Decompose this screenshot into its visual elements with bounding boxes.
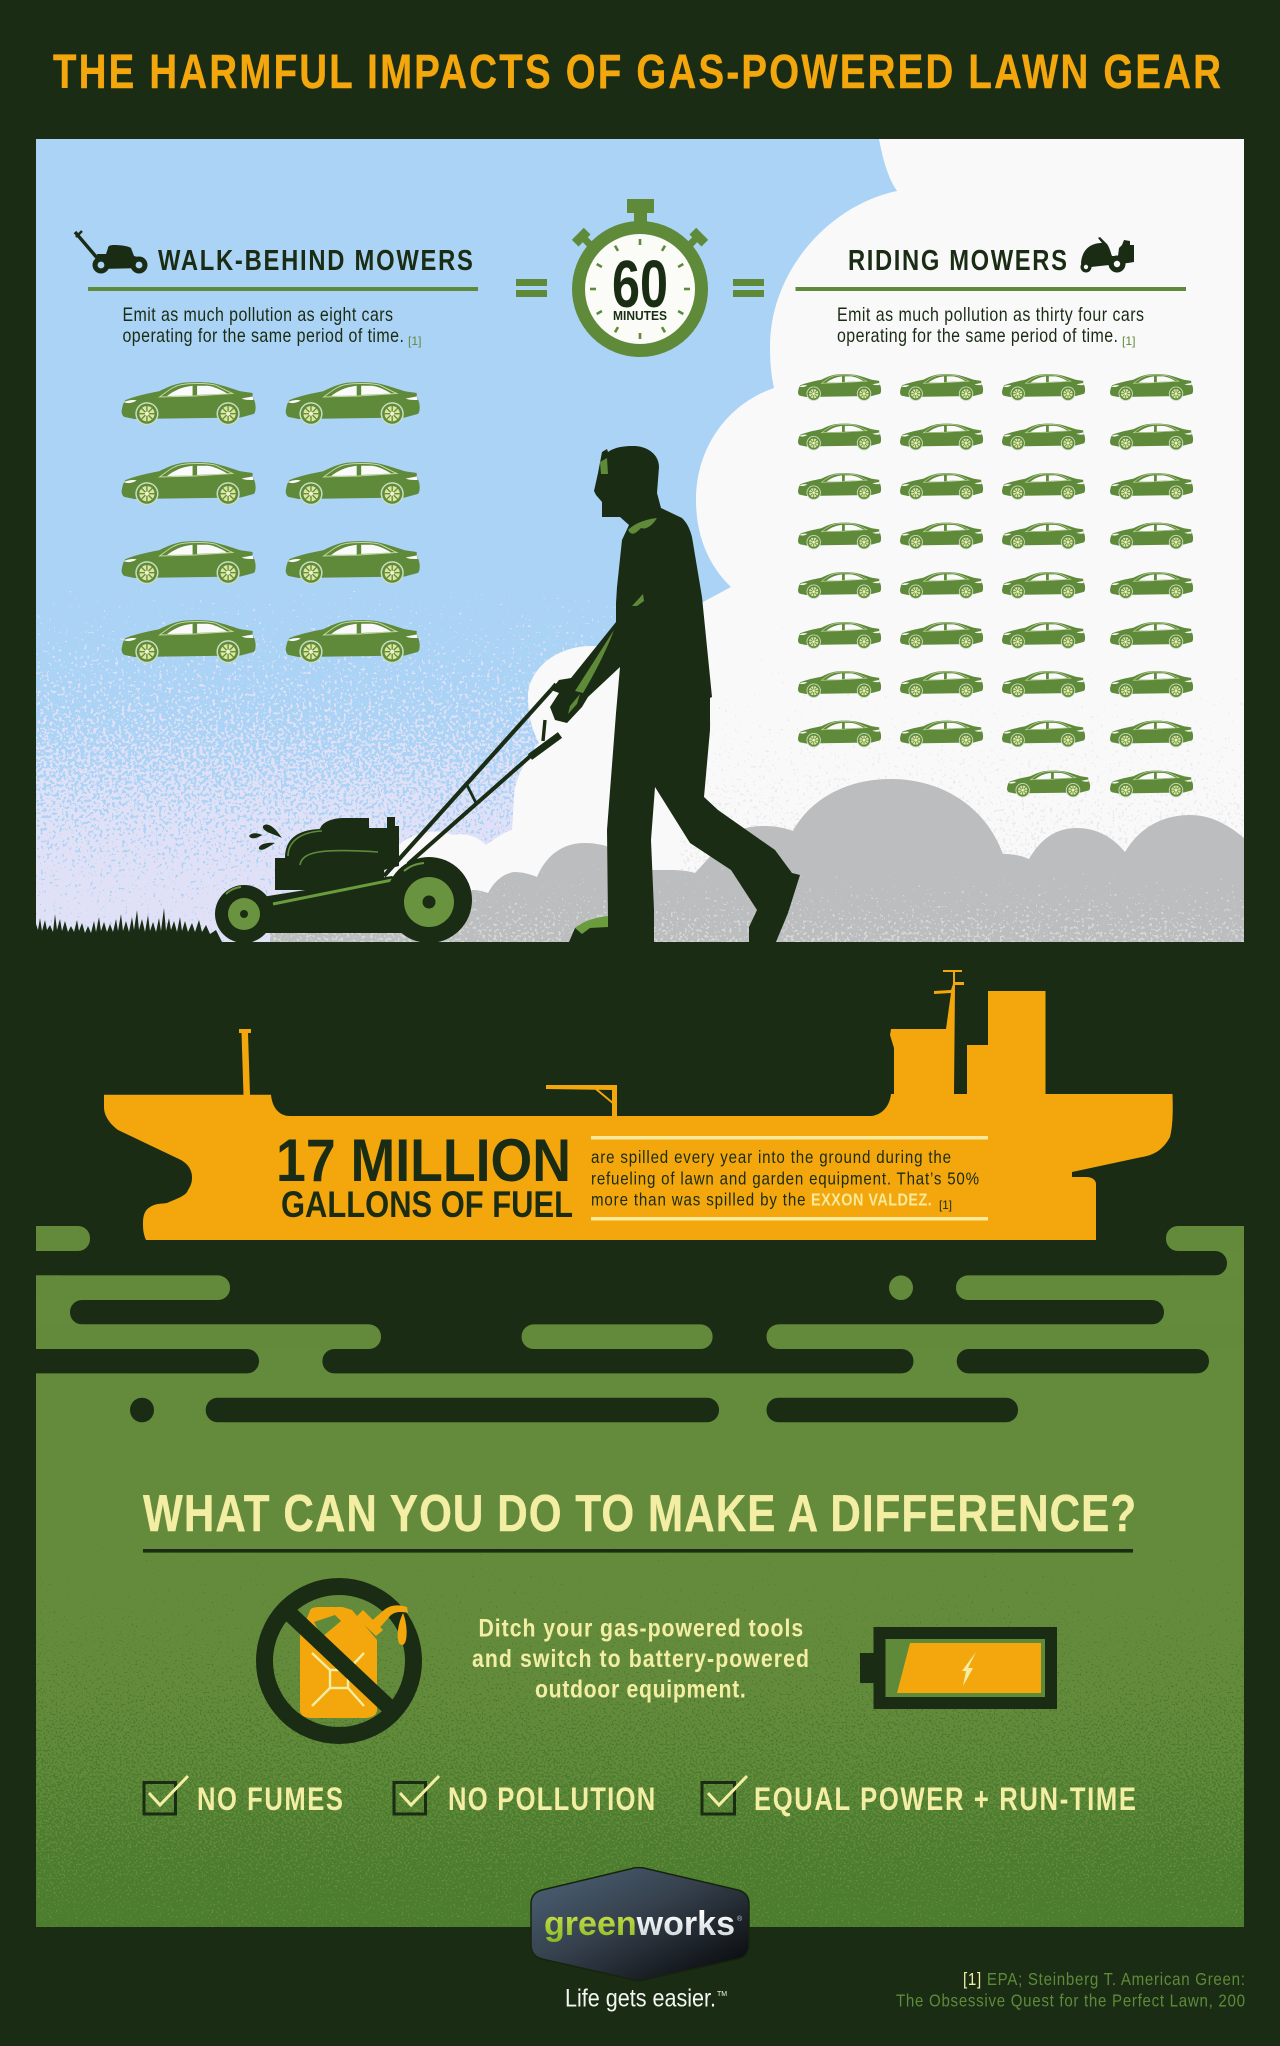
- oil band cut-outs: [0, 1226, 1280, 1349]
- text: riding description: operating for the same period of time.: [837, 325, 1118, 346]
- tagline: TM: [717, 1991, 727, 1998]
- icon: walk-behind mower: [75, 231, 148, 274]
- footnote: [1] EPA; Steinberg T. American Green:: [963, 1969, 1245, 1989]
- statistic description: more than was spilled by the: [591, 1189, 806, 1210]
- highlights: [568, 458, 657, 934]
- text: riding description: [837, 304, 1144, 348]
- statistic description: [1]: [939, 1198, 952, 1212]
- engine highlights: [288, 831, 378, 865]
- terminal: [860, 1653, 874, 1683]
- can body: [300, 1607, 377, 1718]
- exhaust splash: [249, 824, 282, 850]
- icon: no gas can: [264, 1586, 414, 1736]
- footnote: The Obsessive Quest for the Perfect Lawn, 200: [896, 1990, 1245, 2011]
- side lugs: [572, 228, 708, 249]
- equals sign left: [516, 279, 547, 297]
- lawn mower: [215, 684, 560, 943]
- grey cloud stipple: [270, 860, 1244, 942]
- heading: walk-behind mowers: [75, 231, 478, 291]
- hull and superstructure: [104, 970, 1173, 1240]
- item: no pollution: [394, 1776, 655, 1818]
- sky background: [36, 139, 1244, 942]
- rear wheel: [215, 885, 273, 943]
- unit: MINUTES: [613, 308, 667, 323]
- logo: greenworks: [531, 1868, 749, 1980]
- prohibition ring: [264, 1586, 414, 1736]
- item: no fumes: NO FUMES: [197, 1782, 343, 1818]
- panel: green action panel: [0, 1226, 1280, 1927]
- title: THE HARMFUL IMPACTS OF GAS-POWERED LAWN GEAR: [53, 46, 1221, 99]
- item: equal power: EQUAL POWER + RUN-TIME: [754, 1782, 1136, 1818]
- prohibition slash: [288, 1612, 392, 1710]
- front wheel: [386, 857, 472, 943]
- cloud stipple: [680, 620, 1244, 942]
- text rules: [591, 1136, 988, 1220]
- casing: [880, 1633, 1051, 1703]
- statistic description: are spilled every year into the ground during the: [591, 1147, 951, 1167]
- text: recommendation: [472, 1614, 809, 1703]
- crown: [627, 199, 654, 226]
- charge: [897, 1643, 1041, 1693]
- deck: [262, 876, 440, 933]
- car grid: thirty four cars: [798, 374, 1193, 797]
- registered mark: ®: [737, 1915, 743, 1923]
- heading: what can you do: WHAT CAN YOU DO TO MAKE A DIFFERENCE?: [143, 1485, 1136, 1543]
- text: recommendation: outdoor equipment.: [535, 1675, 746, 1703]
- statistic description: refueling of lawn and garden equipment. That’s 50%: [591, 1168, 979, 1189]
- label: RIDING MOWERS: [848, 244, 1067, 277]
- heading: riding mowers: [796, 237, 1186, 291]
- ticks: [590, 239, 690, 339]
- statistic: 17 MILLION: [276, 1127, 571, 1194]
- item: no pollution: NO POLLUTION: [448, 1782, 655, 1818]
- badge: [531, 1868, 749, 1980]
- deck highlight: [273, 880, 392, 904]
- panel stipple: [36, 1226, 1244, 1927]
- car grid: eight cars: [122, 382, 420, 663]
- label: WALK-BEHIND MOWERS: [158, 244, 473, 277]
- panel frame bottom strip: [0, 942, 1280, 1226]
- tagline: Life gets easier.: [565, 1985, 716, 2013]
- statistic description: EXXON VALDEZ.: [811, 1190, 932, 1210]
- icon: stopwatch 60 minutes: [572, 199, 708, 350]
- panel: sky scene: [36, 139, 1244, 942]
- rule: [796, 287, 1186, 291]
- bolt: [962, 1652, 976, 1686]
- statistic description: [591, 1147, 979, 1212]
- text: recommendation: Ditch your gas-powered tools: [478, 1614, 803, 1642]
- text: riding description: Emit as much pollution as thirty four cars: [837, 304, 1144, 325]
- text: recommendation: and switch to battery-powered: [472, 1644, 809, 1672]
- can handle opening: [314, 1615, 341, 1637]
- panel base: [36, 1226, 1244, 1927]
- man silhouette: [550, 446, 800, 942]
- icon: riding mower: [1080, 237, 1134, 272]
- can embossing: [312, 1653, 364, 1706]
- white exhaust cloud: [385, 139, 1244, 942]
- text: riding description: [1]: [1122, 334, 1136, 348]
- oil tanker: [104, 970, 1173, 1240]
- crane brace: [596, 1089, 614, 1104]
- grey exhaust cloud: [270, 779, 1244, 942]
- number: 60: [612, 247, 668, 322]
- fuel drop: [398, 1613, 407, 1645]
- text: walk-behind description: [122, 304, 422, 348]
- text: walk-behind description: Emit as much pollution as eight cars: [122, 304, 393, 325]
- text: walk-behind description: operating for the same period of time.: [122, 325, 404, 346]
- handle rails: [384, 684, 560, 876]
- grass: [36, 908, 222, 942]
- sky stipple haze: [36, 590, 736, 942]
- heading rule: [143, 1549, 1133, 1553]
- checklist: [144, 1776, 1136, 1818]
- dial: [578, 228, 702, 350]
- item: no fumes: [144, 1776, 343, 1818]
- oil drip band: [0, 1226, 1227, 1422]
- side frames: [0, 1200, 1280, 1960]
- icon: battery: [860, 1633, 1051, 1703]
- equals sign right: [733, 279, 764, 297]
- rule: [88, 287, 478, 291]
- statistic unit: GALLONS OF FUEL: [281, 1184, 573, 1225]
- wordmark: greenworks: [544, 1905, 735, 1943]
- engine: [275, 817, 399, 890]
- can spout: [356, 1605, 408, 1636]
- text: walk-behind description: [1]: [408, 334, 422, 348]
- footnote: [896, 1969, 1245, 2011]
